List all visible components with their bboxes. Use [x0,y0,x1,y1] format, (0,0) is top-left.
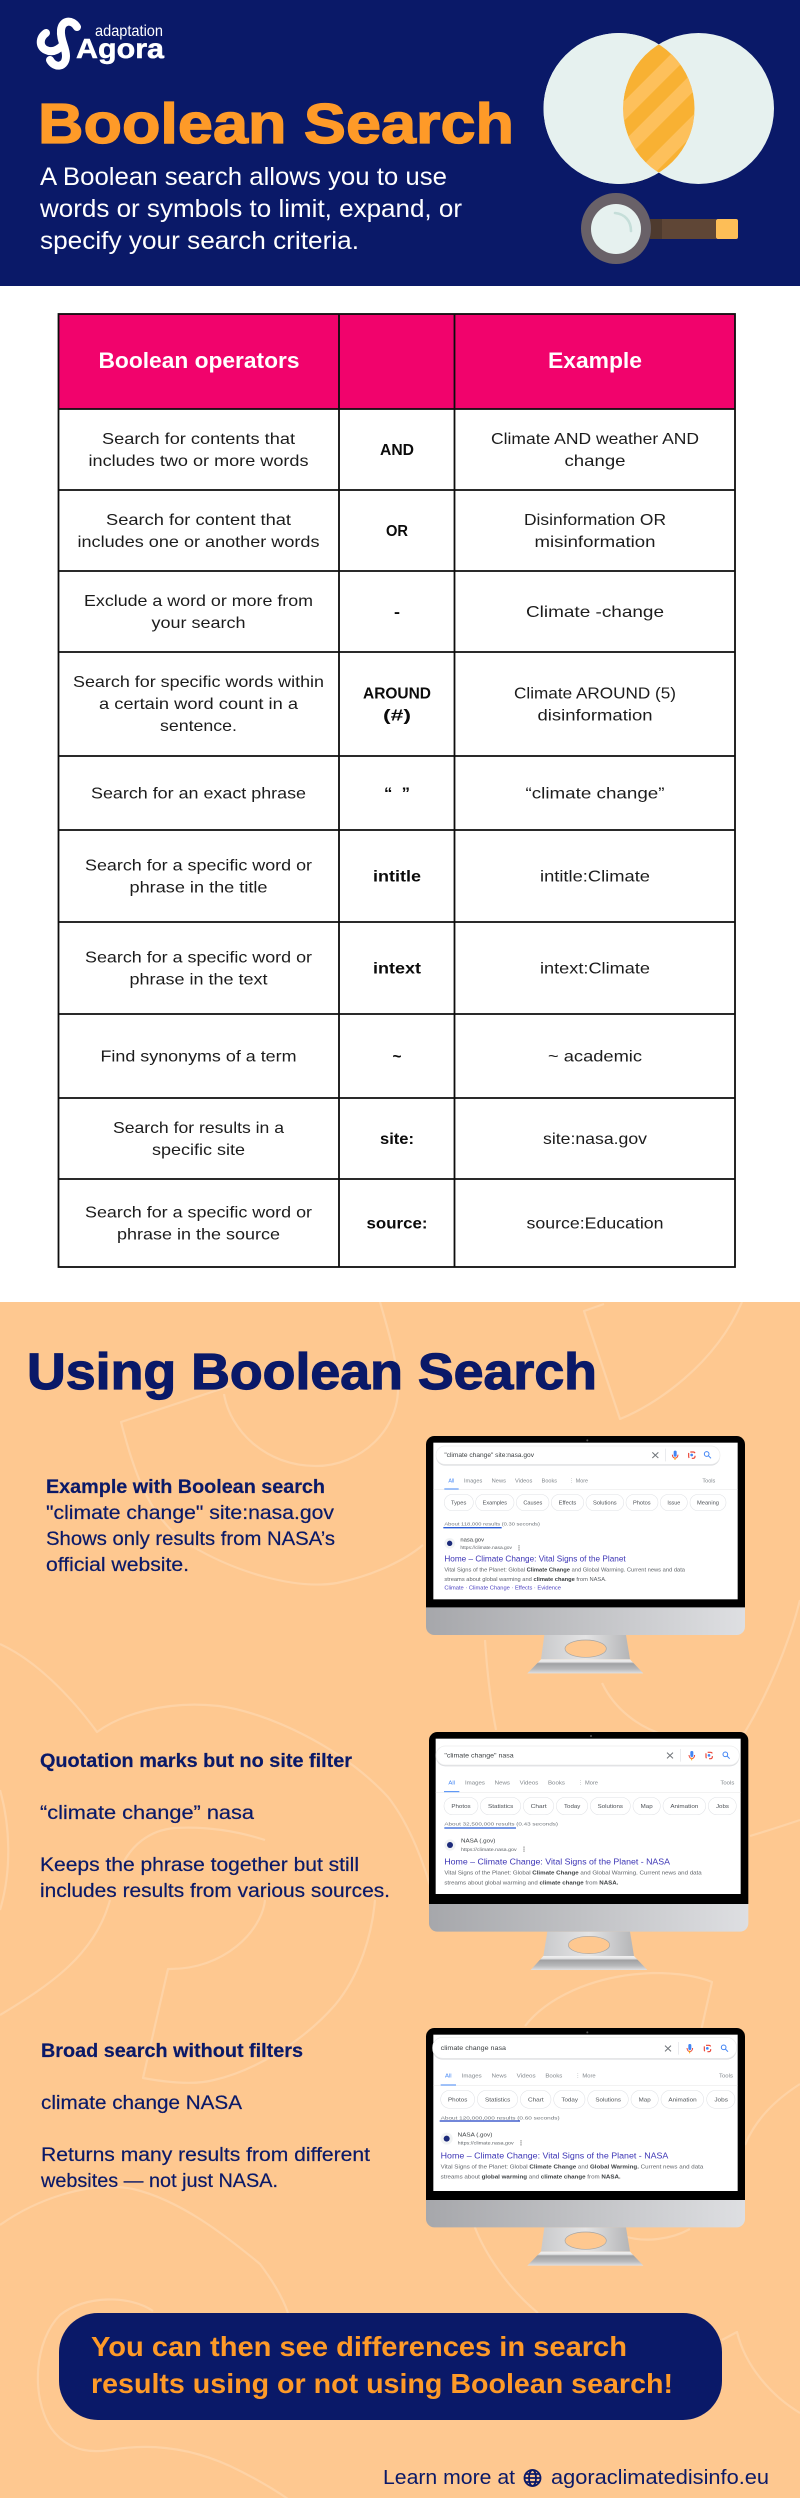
intro text: A Boolean search allows you to use [40,163,447,191]
row: AROUND: a certain word count in a [99,696,298,713]
monitor: broad search: NASA (.gov) [458,2132,493,2138]
monitor: quoted search: Home – Climate Change: Vital Signs of the Planet - NASA [444,1856,670,1866]
monitor: quoted search: "climate change" nasa [444,1752,514,1759]
monitor: broad search: Chart [528,2097,544,2103]
monitor: site filter search: nasa.gov [460,1537,484,1543]
row: intext: Search for a specific word or [85,950,313,966]
monitor: quoted search: About 32,500,000 results (0.43 seconds) [444,1822,558,1828]
row: AROUND: Climate AROUND (5) [514,686,676,702]
row: synonyms: ~ academic [548,1048,642,1066]
icon: venn diagram [544,33,774,184]
row: minus: - [394,604,400,621]
monitor: site filter search: Images [464,1478,482,1484]
monitor: site filter search: Issue [667,1501,680,1507]
logo: adaptation Agora: Agora [76,33,164,64]
row: exact phrase: Search for an exact phrase [91,786,306,802]
intro text: specify your search criteria. [40,227,359,255]
row: OR: OR [386,523,408,540]
row: AROUND: disinformation [538,708,652,724]
monitor: broad search: News [492,2074,507,2080]
row: minus: Exclude a word or more from [84,593,313,610]
row: intitle: intitle:Climate [540,868,650,886]
row: AND: Climate AND weather AND [491,431,699,448]
monitor: quoted search: Animation [670,1804,698,1810]
row: exact phrase: “climate change” [526,786,664,802]
intro text: words or symbols to limit, expand, or [39,195,462,223]
monitor: quoted search: Chart [531,1804,547,1810]
monitor: broad search: Books [545,2074,563,2080]
title: Boolean Search [38,92,514,156]
monitor: broad search: Solutions [595,2097,621,2103]
monitor: broad search: Tools [719,2074,733,2080]
monitor: site filter search: All [448,1478,454,1484]
text block: broad search without filters: websites — not just NASA. [40,2171,278,2192]
footer: learn more [383,2467,769,2489]
text block: quotation marks but no site filter: includes results from various sources. [40,1881,390,1902]
monitor: site filter search: Types [451,1501,467,1507]
monitor: site filter search: https://climate.nasa.gov [460,1545,513,1550]
monitor: site filter search [426,1436,745,1673]
row: OR: Disinformation OR [524,512,666,529]
row: source [85,1204,664,1244]
monitor: quoted search: ⋮ More [578,1781,598,1787]
monitor: site filter search: Videos [515,1478,532,1484]
text block: example with boolean search [46,1477,335,1576]
monitor: quoted search: Tools [720,1781,734,1787]
row: source: source:Education [526,1216,664,1232]
table header row [58,314,735,409]
monitor: quoted search: Vital Signs of the Planet: Global Climate Change and Global Warming. Current news and data [444,1870,702,1876]
monitor: quoted search: Map [641,1804,653,1810]
monitor: quoted search: Videos [520,1781,539,1787]
panel: header [0,0,800,298]
monitor: quoted search: https://climate.nasa.gov [461,1847,518,1852]
callout: differences in search results [59,2313,722,2420]
monitor: site filter search: Climate · Climate Change · Effects · Evidence [444,1586,561,1592]
logo: adaptation Agora [41,22,164,66]
row: intitle: Search for a specific word or [85,858,313,874]
row: minus [84,593,664,632]
text block: example with boolean search: official website. [46,1555,189,1576]
callout: differences in search results: results using or not using Boolean search! [91,2368,673,2399]
row: intext: intext:Climate [540,960,650,978]
text block: quotation marks but no site filter: Keeps the phrase together but still [40,1855,359,1876]
footer: learn more: agoraclimatedisinfo.eu [551,2467,769,2489]
row: AND [88,431,699,470]
text block: quotation marks but no site filter: Quotation marks but no site filter [40,1751,353,1772]
text block: example with boolean search: Example with Boolean search [46,1477,325,1498]
monitor: site filter search: streams about global warming and climate change from NASA. [444,1577,607,1583]
row: intext: phrase in the text [130,972,268,988]
row: OR: misinformation [534,534,656,551]
row: synonyms: Find synonyms of a term [100,1048,296,1066]
monitor: quoted search: Jobs [716,1804,729,1810]
monitor: quoted search: Images [465,1781,485,1787]
row: synonyms: ~ [392,1048,402,1066]
monitor: broad search: ⋮ More [575,2074,596,2080]
row: minus: Climate -change [526,604,664,621]
monitor: broad search: https://climate.nasa.gov [458,2141,515,2146]
row: AROUND: (#) [383,708,411,724]
monitor: broad search: Map [639,2097,651,2103]
row: AND: change [564,453,626,470]
monitor: site filter search: ⋮ More [569,1478,588,1484]
monitor: broad search: Photos [448,2097,468,2103]
row: AROUND [73,674,676,735]
monitor: broad search: streams about global warming and climate change from NASA. [441,2175,621,2181]
text block: quotation marks but no site filter: “climate change” nasa [40,1803,254,1824]
monitor: quoted search: streams about global warming and climate change from NASA. [444,1880,619,1886]
monitor: broad search: climate change nasa [441,2045,506,2052]
monitor: site filter search: About 118,000 results (0.30 seconds) [444,1522,540,1528]
panel: using boolean search [0,1302,800,2499]
row: site: site: [380,1131,414,1148]
callout: differences in search results: You can then see differences in search [91,2331,627,2362]
row: exact phrase: “ ” [384,786,410,802]
monitor: broad search: Jobs [714,2097,728,2103]
row: AND: AND [380,442,414,459]
monitor: site filter search: Home – Climate Change: Vital Signs of the Planet [444,1554,626,1564]
row: source: phrase in the source [117,1226,280,1244]
monitor: quoted search: All [448,1781,455,1787]
monitor: quoted search: Photos [451,1804,471,1810]
monitor: broad search: Vital Signs of the Planet: Global Climate Change and Global Warming. Current news and data [441,2165,703,2171]
icon: globe [524,2470,540,2486]
monitor: broad search: Animation [668,2097,697,2103]
monitor: site filter search: Causes [523,1501,542,1507]
row: AROUND: sentence. [160,718,237,735]
monitor: quoted search [429,1732,748,1970]
row: site [113,1120,647,1159]
text block: example with boolean search: "climate change" site:nasa.gov [46,1503,335,1524]
row: site: site:nasa.gov [543,1131,647,1148]
monitor: broad search: Home – Climate Change: Vital Signs of the Planet - NASA [441,2150,669,2160]
row: intitle: intitle [373,868,421,886]
intro text [39,163,462,255]
table header row: Boolean operators [98,348,300,373]
monitor: broad search: About 120,000,000 results (0.60 seconds) [441,2115,560,2121]
monitor: broad search: Images [462,2074,482,2080]
row: source: Search for a specific word or [85,1204,313,1222]
row: OR: includes one or another words [78,534,320,551]
row: OR: Search for content that [106,512,292,529]
monitor: quoted search: Statistics [488,1804,514,1810]
monitor: quoted search: NASA (.gov) [461,1838,496,1844]
row: AND: includes two or more words [88,453,308,470]
monitor: quoted search: Solutions [598,1804,623,1810]
monitor: broad search: Statistics [485,2097,511,2103]
row: AROUND: AROUND [363,686,431,702]
monitor: site filter search: Meaning [697,1501,719,1507]
logo: adaptation Agora: adaptation [95,23,163,40]
row: minus: your search [152,615,246,632]
text block: broad search without filters: climate change NASA [41,2093,242,2114]
monitor: site filter search: Examples [483,1501,507,1507]
row: AROUND: Search for specific words within [73,674,324,691]
heading: using boolean search: Using Boolean Search [27,1343,597,1400]
text block: broad search without filters: Broad search without filters [41,2041,303,2062]
text block: broad search without filters [40,2041,371,2192]
panel: operators table [58,314,735,1267]
row: exact phrase [91,786,664,802]
row: intitle: phrase in the title [130,880,268,896]
monitor: quoted search: Today [564,1804,581,1810]
row: intext [85,950,650,988]
monitor: broad search: Videos [517,2074,536,2080]
monitor: site filter search: Tools [702,1478,715,1484]
monitor: site filter search: Photos [633,1501,651,1507]
monitor: quoted search: Books [548,1781,565,1787]
row: AND: Search for contents that [102,431,296,448]
text block: quotation marks but no site filter [40,1751,390,1902]
monitor: site filter search: Solutions [593,1501,617,1507]
table header row: Example [548,348,642,373]
row: site: Search for results in a [113,1120,284,1137]
monitor: site filter search: Vital Signs of the Planet: Global Climate Change and Global Warming. Current news and data [444,1568,685,1574]
row: synonyms [100,1048,642,1066]
row: source: source: [366,1216,428,1232]
row: OR [78,512,666,551]
monitor: site filter search: Effects [559,1501,577,1507]
text block: example with boolean search: Shows only results from NASA’s [46,1529,335,1550]
monitor: quoted search: News [495,1781,510,1787]
icon: magnifying glass [581,193,738,264]
monitor: site filter search: Books [542,1478,557,1484]
monitor: site filter search: News [492,1478,506,1484]
row: intitle [85,858,650,896]
footer: learn more: Learn more at [383,2467,515,2489]
monitor: broad search: All [445,2074,452,2080]
text block: broad search without filters: Returns many results from different [41,2145,371,2166]
monitor: site filter search: "climate change" site:nasa.gov [444,1452,535,1459]
row: intext: intext [373,960,422,978]
row: site: specific site [152,1142,245,1159]
monitor: broad search: Today [561,2097,578,2103]
monitor: broad search [426,2028,745,2266]
